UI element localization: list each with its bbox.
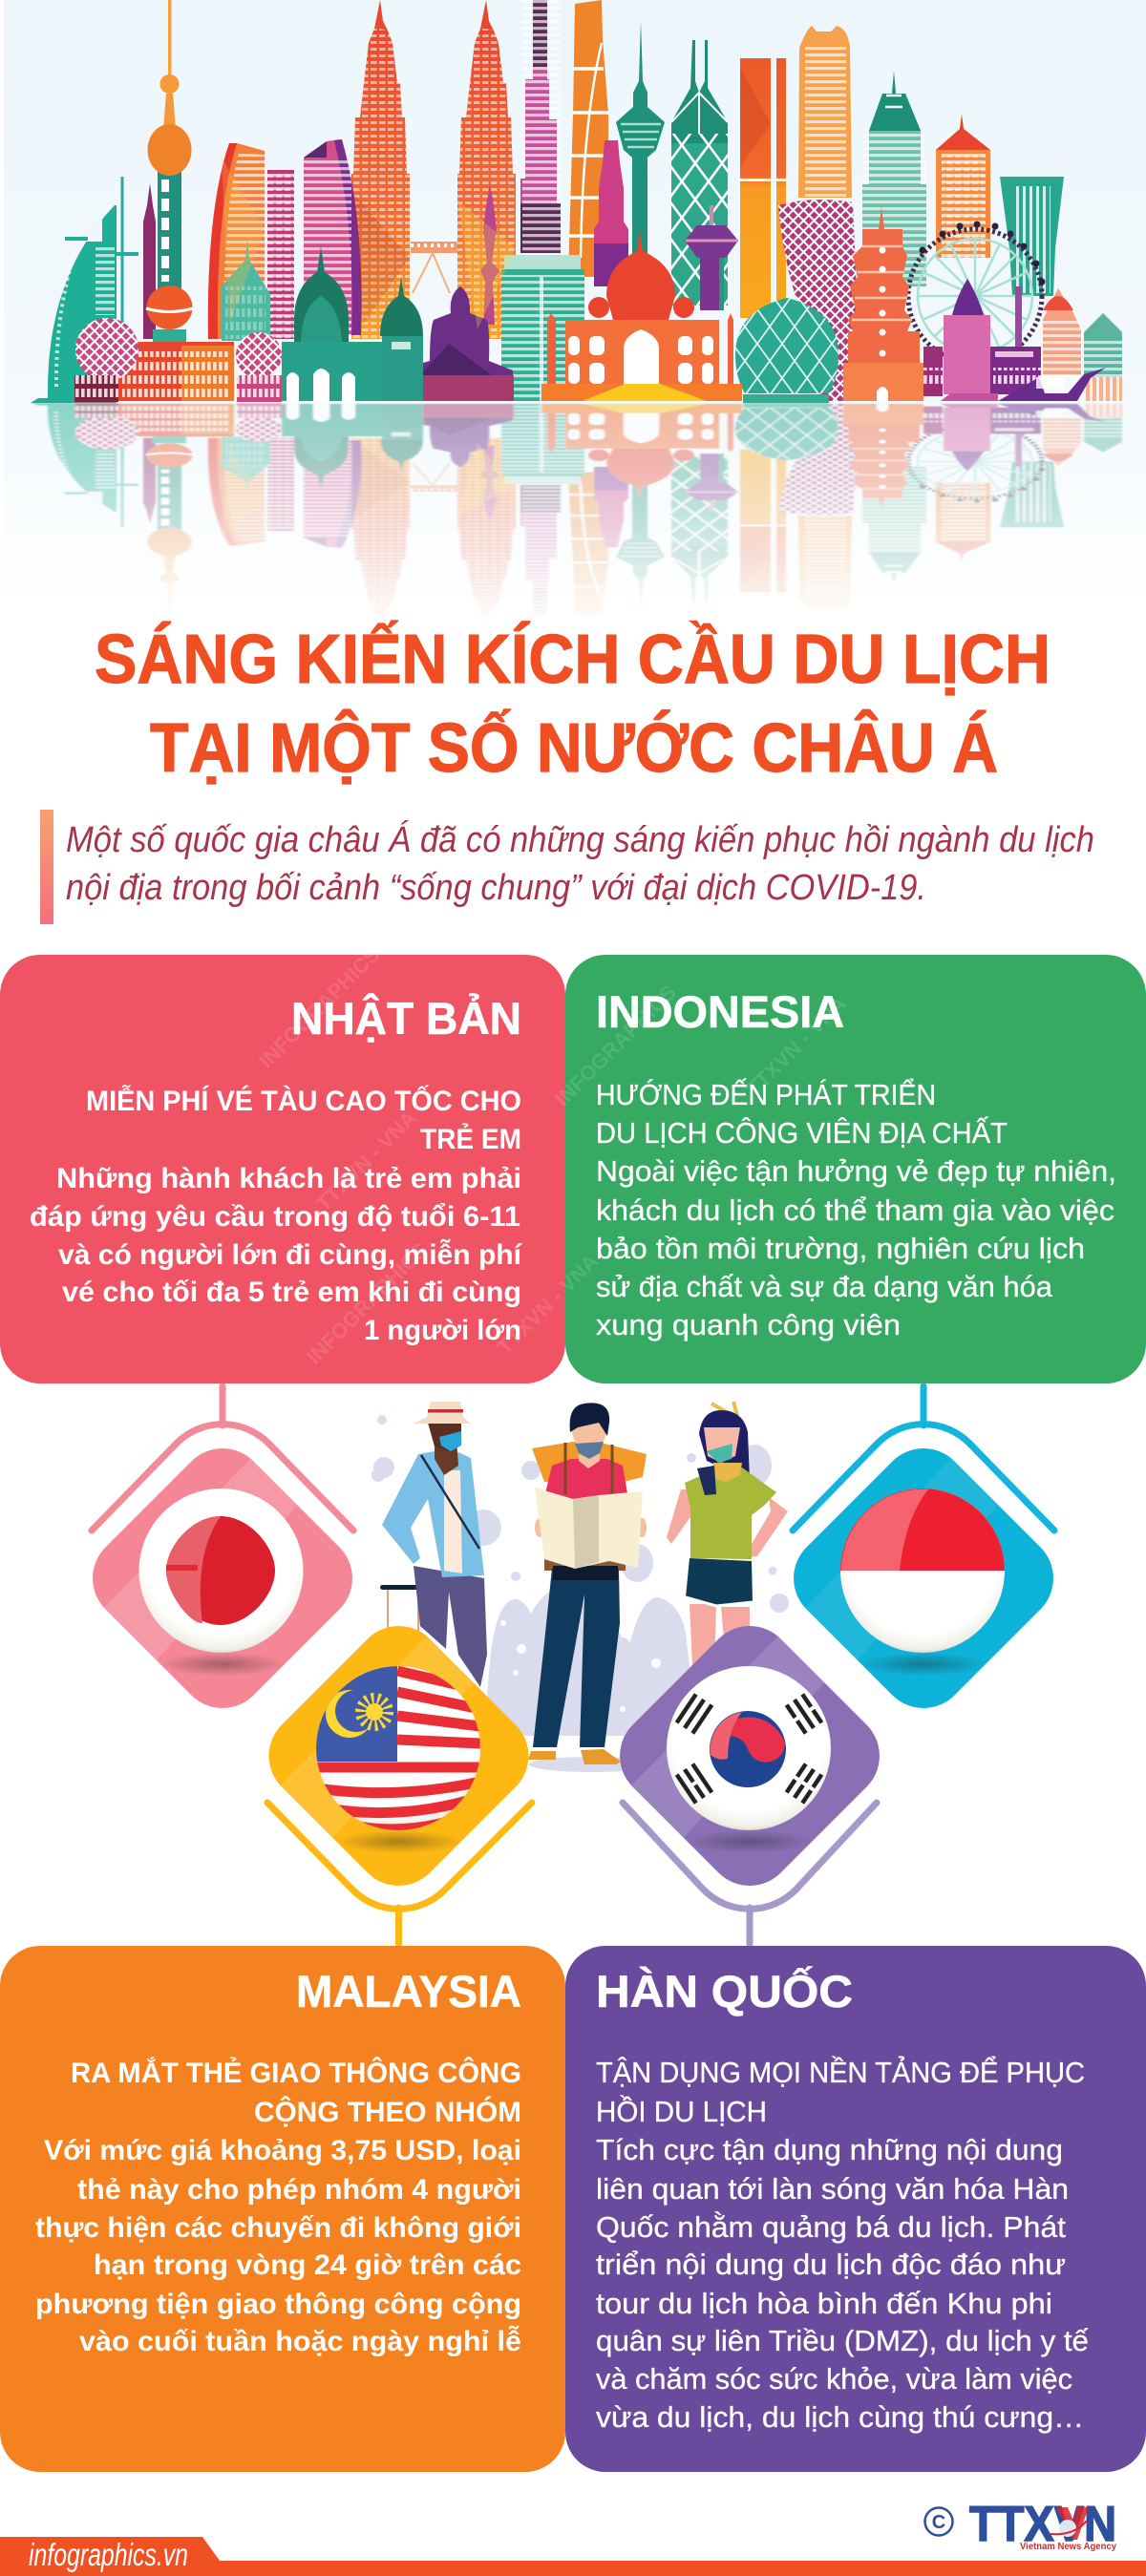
Indonesia body text (596, 1154, 1116, 1341)
Japan body text: Những hành khách là trẻ em phải (56, 1163, 521, 1194)
Korea body text: triển nội dung du lịch độc đáo như (596, 2248, 1066, 2281)
Malaysia heading: MALAYSIA (296, 1966, 521, 2016)
Japan subheading (86, 1085, 521, 1155)
magenta minaret (594, 140, 628, 286)
Malaysia subheading (71, 2057, 521, 2128)
Malaysia body text (35, 2135, 521, 2357)
gold tower (798, 26, 852, 198)
mid grid building (501, 269, 584, 401)
small minaret (480, 184, 499, 325)
watermarks: TTXVN - VNA (311, 1106, 421, 1216)
footer band with website: infographics.vn (29, 2537, 188, 2572)
Indonesia subheading: DU LỊCH CÔNG VIÊN ĐỊA CHẤT (596, 1116, 1008, 1150)
Indonesia heading: INDONESIA (596, 986, 844, 1037)
Korea body text: liên quan tới làn sóng văn hóa Hàn (596, 2172, 1069, 2206)
Japan subheading: TRẺ EM (420, 1123, 521, 1155)
Oriental Pearl tower (143, 183, 156, 339)
logo: TTXVN: Vietnam News Agency (1020, 2541, 1116, 2552)
Burj Al Arab (31, 205, 117, 403)
Indonesia body text: bảo tồn môi trường, nghiên cứu lịch (596, 1232, 1085, 1265)
KL tower (616, 21, 665, 258)
Japan subheading: MIỄN PHÍ VÉ TÀU CAO TỐC CHO (86, 1085, 521, 1117)
tall purple tower (520, 0, 561, 253)
icon: Japan flag in rounded diamond (93, 1448, 352, 1708)
Korea body text: quân sự liên Triều (DMZ), du lịch y tế (596, 2324, 1089, 2357)
Japan body text: 1 người lớn (364, 1315, 521, 1346)
Korea body text: Tích cực tận dụng những nội dung (596, 2133, 1063, 2166)
orange tower (936, 115, 990, 258)
pagoda (843, 207, 923, 401)
Indonesia subheading: HƯỚNG ĐẾN PHÁT TRIỂN (596, 1078, 936, 1111)
Korea subheading: TẬN DỤNG MỌI NỀN TẢNG ĐỂ PHỤC (596, 2056, 1085, 2089)
Japan body text: đáp ứng yêu cầu trong độ tuổi 6-11 (30, 1201, 520, 1233)
title: SÁNG KIẾN KÍCH CẦU DU LỊCH (95, 621, 1050, 698)
logo: TTXVN: C (932, 2512, 945, 2533)
Korea body text: vừa du lịch, du lịch cùng thú cưng… (596, 2400, 1084, 2434)
panel: Japan (0, 955, 565, 1383)
Korea body text (596, 2133, 1089, 2434)
green domes and mosque (294, 246, 349, 342)
footer band with website (0, 2537, 1146, 2576)
Japan body text (30, 1163, 523, 1346)
Taj Mahal (565, 320, 719, 385)
Korea heading: HÀN QUỐC (596, 1966, 853, 2016)
icon: Indonesia flag in rounded diamond (794, 1448, 1053, 1708)
low-poly tint facets (222, 158, 265, 325)
Korea body text: tour du lịch hòa bình đến Khu phi (596, 2287, 1052, 2320)
man with hat and suitcase (380, 1402, 487, 1687)
purple palace and boat (1015, 286, 1022, 347)
Korea body text: và chăm sóc sức khỏe, vừa làm việc (596, 2362, 1072, 2396)
Japan body text: và có người lớn đi cùng, miễn phí (58, 1238, 523, 1271)
green lattice dome (735, 298, 838, 393)
Buddha (406, 286, 513, 377)
twisted orange tower (568, 0, 608, 277)
connector: Japan flag to panel (92, 1386, 353, 1531)
background blobs (371, 1415, 789, 1772)
teal crown tower (1000, 177, 1064, 296)
connector: Indonesia flag to panel (793, 1386, 1054, 1531)
panel: Malaysia (0, 1946, 565, 2472)
skyline reflection (31, 403, 1122, 624)
purple lattice tower (778, 200, 858, 401)
watermarks: INFOGRAPHICS (550, 981, 681, 1111)
Japan body text: vé cho tối đa 5 trẻ em khi đi cùng (62, 1277, 521, 1308)
connector: Korea flag to panel (623, 1803, 877, 1944)
illustration: colourful Asian city skyline (31, 0, 1122, 403)
Bank of China tower (671, 40, 728, 306)
Malaysia body text: thực hiện các chuyến đi không giới (35, 2212, 521, 2244)
right low buildings (1043, 288, 1081, 375)
teal mini tower (222, 239, 270, 341)
man reading a map (528, 1403, 647, 1764)
Malaysia body text: Với mức giá khoảng 3,75 USD, loại (44, 2135, 521, 2166)
Malaysia body text: vào cuối tuần hoặc ngày nghỉ lễ (79, 2325, 521, 2357)
woman with phone (667, 1402, 788, 1666)
ferris wheel (918, 239, 1032, 353)
lattice spheres and windowed blocks (75, 318, 138, 381)
watermarks (254, 942, 851, 1369)
Indonesia subheading (596, 1078, 1008, 1150)
pink windowed tower (267, 170, 294, 339)
round ball tower (700, 253, 724, 310)
title: TẠI MỘT SỐ NƯỚC CHÂU Á (150, 708, 998, 787)
title (95, 621, 1050, 787)
Malaysia body text: phương tiện giao thông công cộng (35, 2289, 521, 2320)
curved orange tower (208, 143, 265, 339)
icon: South Korea flag in rounded diamond (620, 1626, 880, 1886)
logo: TTXVN: TTXVN (969, 2497, 1116, 2552)
Malaysia subheading: CỘNG THEO NHÓM (254, 2096, 521, 2128)
watermarks: INFOGRAPHICS (254, 942, 385, 1073)
connector: Malaysia flag to panel (267, 1803, 532, 1944)
Malaysia subheading: RA MẮT THẺ GIAO THÔNG CÔNG (71, 2057, 521, 2089)
header background (4, 0, 1146, 611)
Indonesia body text: Ngoài việc tận hưởng vẻ đẹp tự nhiên, (596, 1154, 1116, 1188)
panel: South Korea (565, 1946, 1146, 2472)
intro text with accent bar: nội địa trong bối cảnh “sống chung” với đại dịch COVID-19. (66, 868, 926, 908)
Indonesia body text: khách du lịch có thể tham gia vào việc (596, 1193, 1114, 1227)
twin orange towers (740, 58, 771, 318)
Indonesia body text: xung quanh công viên (596, 1308, 901, 1341)
purple curved tower (304, 139, 360, 335)
Korea subheading: HỒI DU LỊCH (596, 2094, 767, 2128)
watermarks: INFOGRAPHICS (302, 1238, 433, 1369)
illustration: masked tourists (371, 1402, 789, 1772)
red building (117, 342, 234, 401)
Japan heading: NHẬT BẢN (291, 993, 521, 1044)
panel: Indonesia (565, 955, 1146, 1383)
intro text with accent bar (40, 810, 1094, 924)
watermarks: TTXVN - VNA (493, 1249, 603, 1360)
watermarks: TTXVN - VNA (741, 991, 851, 1102)
Indonesia body text: sử địa chất và sự đa dạng văn hóa (596, 1270, 1053, 1303)
Petronas towers (457, 0, 516, 339)
Malaysia body text: thẻ này cho phép nhóm 4 người (77, 2174, 521, 2206)
Korea body text: Quốc nhằm quảng bá du lịch. Phát (596, 2210, 1066, 2244)
icon: Malaysia flag in rounded diamond (269, 1626, 528, 1886)
Korea subheading (596, 2056, 1085, 2128)
teal tower (862, 72, 926, 286)
Malaysia body text: hạn trong vòng 24 giờ trên các (94, 2249, 521, 2281)
